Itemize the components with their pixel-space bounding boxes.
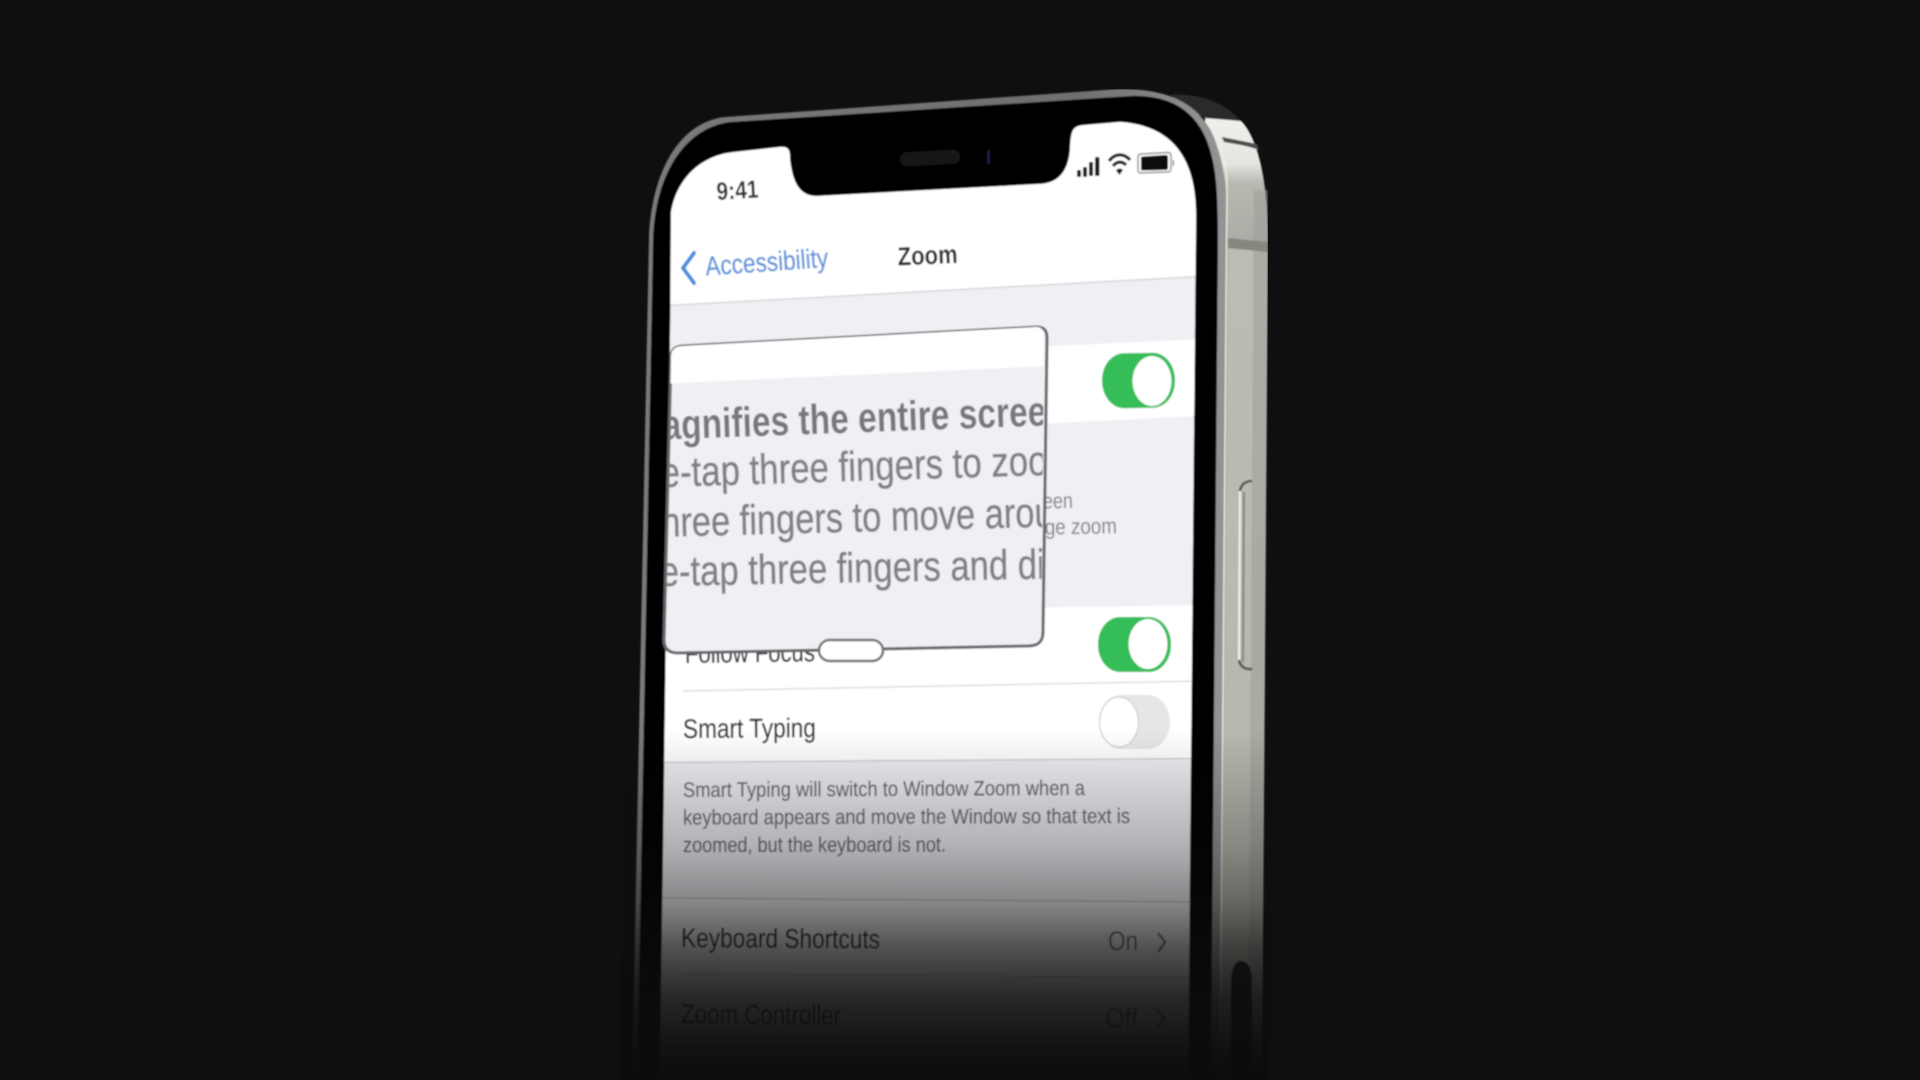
lower side button: [1230, 961, 1252, 1080]
line 2: keyboard appears and move the Window so that text is: [683, 805, 1130, 829]
line 1: Smart Typing will switch to Window Zoom when a: [683, 777, 1085, 802]
navigation bar: [669, 120, 1198, 304]
zoom controller chevron: [1157, 1009, 1164, 1028]
keyboard row divider: [681, 974, 1200, 978]
track: [1099, 695, 1170, 749]
side right shading: [1248, 190, 1268, 1080]
bottom fade overlay: [620, 730, 1275, 1080]
window drag handle: [819, 640, 883, 661]
line 3: zoomed, but the keyboard is not.: [683, 834, 946, 857]
follow focus row: [650, 605, 1200, 762]
notch speaker: [900, 149, 960, 167]
knob: [1132, 356, 1172, 406]
smart typing label: Smart Typing: [683, 713, 816, 744]
battery tip: [1172, 160, 1174, 166]
antenna band top: [1222, 137, 1259, 150]
keyboard shortcuts value: On: [1108, 926, 1138, 956]
button highlight: [1239, 490, 1240, 660]
nav title: Zoom: [897, 239, 958, 271]
magnified line 4: e-tap three fingers and di: [659, 541, 1045, 595]
fragment: een: een: [1043, 488, 1073, 513]
row divider: [683, 681, 1200, 691]
power button: [1239, 481, 1252, 669]
battery shell: [1138, 152, 1171, 173]
toggle on: zoom: [1102, 352, 1175, 409]
smart typing description: [683, 777, 1130, 857]
window contents: [651, 325, 1054, 595]
magnified line 3: three fingers to move arou: [651, 488, 1054, 546]
toggle off: smart typing: [1099, 695, 1170, 749]
front steel edge: [632, 89, 1228, 1080]
black bezel: [637, 96, 1218, 1080]
steel edge highlight: [1207, 120, 1227, 1080]
back label: Accessibility: [704, 243, 830, 281]
antenna band middle: [1228, 238, 1268, 252]
magnified line 1: agnifies the entire scree: [662, 387, 1047, 448]
settings background: [660, 120, 1198, 918]
magnified line 2: e-tap three fingers to zoo: [660, 437, 1048, 496]
knob: [1128, 619, 1168, 669]
keyboard shortcuts rows: [660, 910, 662, 922]
keyboard shortcuts label: Keyboard Shortcuts: [681, 923, 880, 954]
icon: battery: [1138, 152, 1174, 173]
track: [1098, 617, 1171, 672]
row bottom divider: [650, 758, 1200, 762]
fragment: ge zoom: ge zoom: [1045, 513, 1117, 539]
icon: cellular signal: [1077, 157, 1100, 177]
keyboard shortcuts chevron: [1158, 933, 1165, 952]
window body: [664, 327, 1047, 653]
toggle on: follow focus: [1098, 617, 1171, 672]
knob: [1100, 697, 1138, 747]
phone steel side: [1205, 116, 1268, 1080]
magnifier window: [651, 325, 1054, 661]
zoom controller label: Zoom Controller: [681, 999, 841, 1030]
time: 9:41: [716, 175, 759, 206]
navigation divider: [650, 276, 1200, 306]
button bottom hook: [1239, 660, 1252, 669]
notch camera: [987, 150, 990, 164]
back chevron: [683, 253, 694, 283]
side top shadow: [1170, 95, 1241, 121]
magnified header: [660, 325, 1050, 384]
follow focus label: Follow Focus: [685, 637, 815, 669]
button shadow groove: [1243, 492, 1244, 662]
screen: [650, 100, 1210, 1080]
icon: wifi: [1109, 155, 1130, 175]
phone: [632, 89, 1268, 1080]
zoom row: [1047, 339, 1196, 424]
keyboard row top divider: [650, 898, 1200, 902]
partial description text: [1043, 488, 1117, 539]
battery charge: [1141, 155, 1168, 170]
track: [1102, 352, 1175, 409]
button top hook: [1240, 481, 1252, 491]
zoom controller value: Off: [1105, 1003, 1139, 1033]
